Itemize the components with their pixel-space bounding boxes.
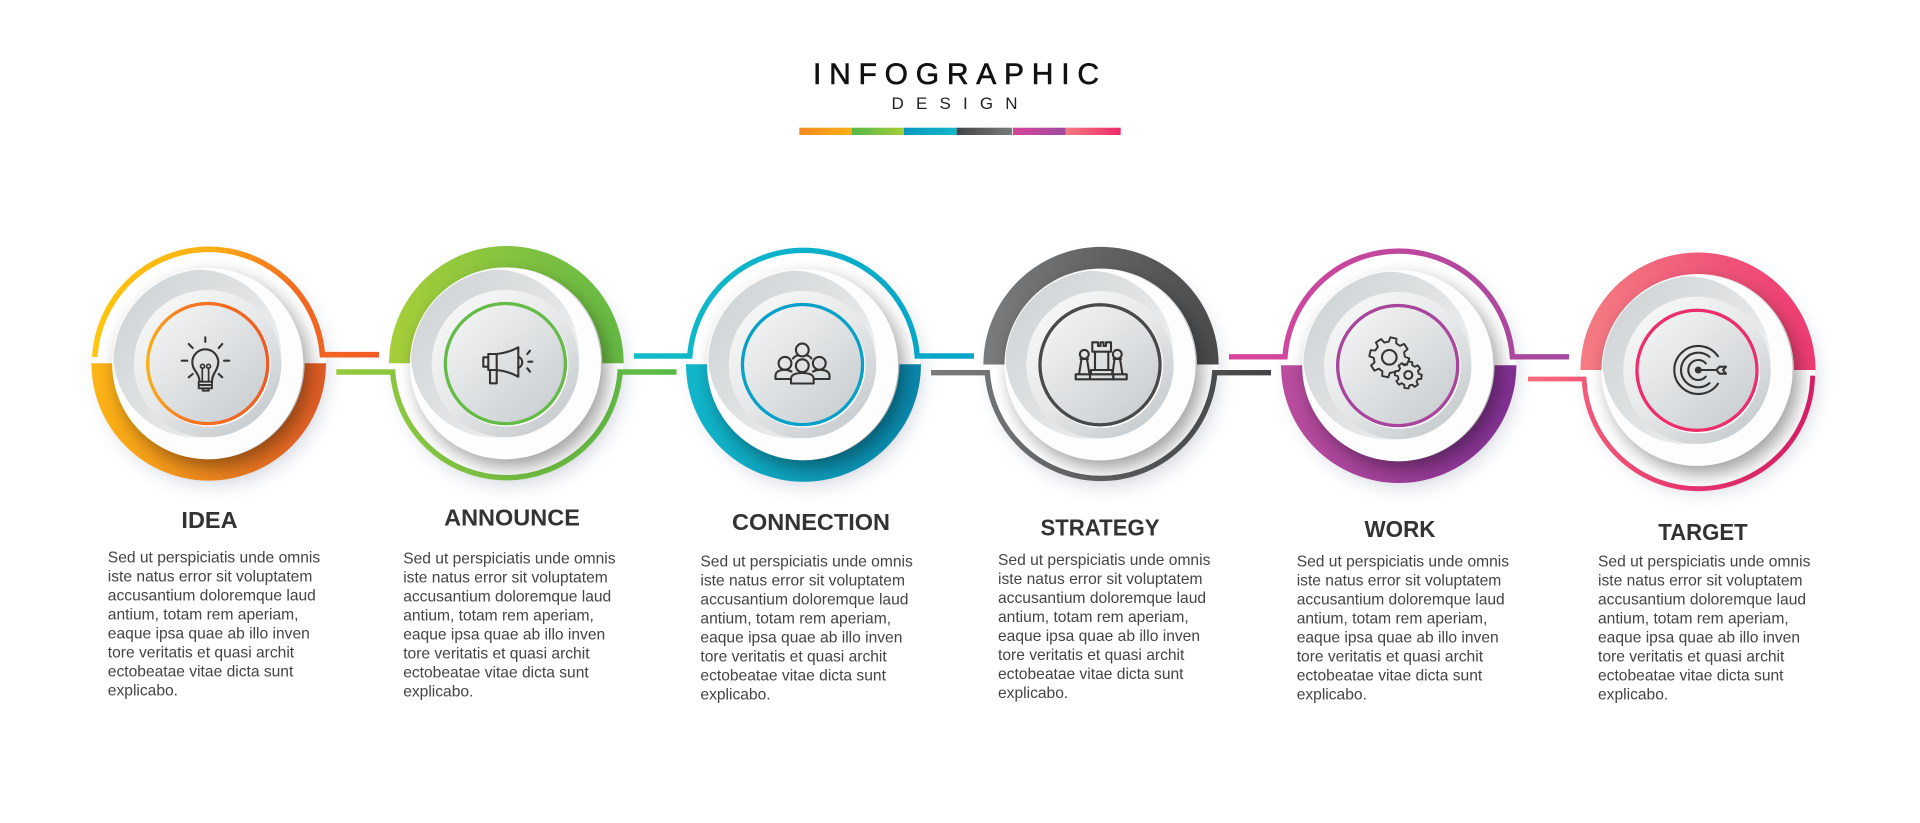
body text: explicabo. bbox=[403, 684, 473, 701]
body text: ectobeatae vitae dicta sunt bbox=[108, 664, 294, 681]
body text: Sed ut perspiciatis unde omnis bbox=[403, 551, 616, 568]
body text: tore veritatis et quasi archit bbox=[1297, 649, 1484, 666]
circle: target bbox=[1528, 253, 1819, 495]
body text: Sed ut perspiciatis unde omnis bbox=[1598, 554, 1811, 571]
body text: Sed ut perspiciatis unde omnis bbox=[108, 550, 320, 567]
circle: idea bbox=[91, 246, 379, 488]
panel: strategy bbox=[931, 247, 1271, 702]
icon: light bulb bbox=[182, 337, 229, 391]
body text: antium, totam rem aperiam, bbox=[108, 607, 298, 624]
body text: ectobeatae vitae dicta sunt bbox=[403, 665, 589, 682]
colour bar bbox=[799, 128, 1121, 135]
body text: iste natus error sit voluptatem bbox=[998, 571, 1203, 588]
body text: Sed ut perspiciatis unde omnis bbox=[998, 552, 1211, 569]
body text: accusantium doloremque laud bbox=[998, 590, 1206, 607]
body text: accusantium doloremque laud bbox=[1598, 592, 1806, 609]
body text: iste natus error sit voluptatem bbox=[700, 573, 905, 590]
body text: Sed ut perspiciatis unde omnis bbox=[1297, 554, 1509, 571]
body text: antium, totam rem aperiam, bbox=[403, 608, 594, 625]
body text: eaque ipsa quae ab illo inven bbox=[108, 626, 310, 643]
heading: WORK bbox=[1364, 516, 1436, 542]
body text: tore veritatis et quasi archit bbox=[108, 645, 295, 662]
body text: iste natus error sit voluptatem bbox=[403, 570, 608, 587]
panel: announce bbox=[336, 246, 676, 701]
icon: target bbox=[1674, 346, 1726, 394]
body text: tore veritatis et quasi archit bbox=[403, 646, 590, 663]
body text: ectobeatae vitae dicta sunt bbox=[1598, 668, 1784, 685]
body text: explicabo. bbox=[1297, 687, 1367, 704]
body text: antium, totam rem aperiam, bbox=[998, 609, 1189, 626]
circle: connection bbox=[634, 247, 974, 489]
heading: TARGET bbox=[1658, 519, 1748, 545]
panel: target bbox=[1528, 253, 1819, 704]
icon: chess pieces bbox=[1076, 342, 1127, 379]
heading: IDEA bbox=[181, 507, 238, 533]
body text: eaque ipsa quae ab illo inven bbox=[1598, 630, 1800, 647]
body text: antium, totam rem aperiam, bbox=[1598, 611, 1789, 628]
body text: ectobeatae vitae dicta sunt bbox=[1297, 668, 1483, 685]
body text: tore veritatis et quasi archit bbox=[700, 649, 887, 666]
body text: iste natus error sit voluptatem bbox=[108, 569, 312, 586]
heading: CONNECTION bbox=[732, 509, 890, 535]
body text: tore veritatis et quasi archit bbox=[1598, 649, 1785, 666]
body text: ectobeatae vitae dicta sunt bbox=[700, 668, 887, 685]
panel: idea bbox=[91, 246, 379, 700]
body text: explicabo. bbox=[108, 683, 178, 700]
body text: iste natus error sit voluptatem bbox=[1598, 573, 1803, 590]
circle: announce bbox=[336, 246, 676, 488]
body text: accusantium doloremque laud bbox=[1297, 592, 1505, 609]
title bbox=[813, 58, 1099, 113]
title: INFOGRAPHIC bbox=[813, 58, 1099, 91]
body text: accusantium doloremque laud bbox=[700, 592, 908, 609]
icon: gears bbox=[1366, 334, 1423, 390]
icon: megaphone bbox=[483, 347, 532, 383]
body text: eaque ipsa quae ab illo inven bbox=[403, 627, 605, 644]
heading: ANNOUNCE bbox=[444, 504, 580, 530]
body text: eaque ipsa quae ab illo inven bbox=[998, 628, 1200, 645]
body text: explicabo. bbox=[998, 685, 1068, 702]
body text: iste natus error sit voluptatem bbox=[1297, 573, 1501, 590]
body text: tore veritatis et quasi archit bbox=[998, 647, 1185, 664]
circle: work bbox=[1229, 248, 1569, 490]
body text: eaque ipsa quae ab illo inven bbox=[700, 630, 902, 647]
subtitle: DESIGN bbox=[892, 94, 1018, 113]
body text: accusantium doloremque laud bbox=[108, 588, 316, 605]
body text: explicabo. bbox=[1598, 687, 1668, 704]
icon: people group bbox=[776, 344, 830, 384]
panel: connection bbox=[634, 247, 974, 704]
circle: strategy bbox=[931, 247, 1271, 490]
body text: eaque ipsa quae ab illo inven bbox=[1297, 630, 1499, 647]
body text: ectobeatae vitae dicta sunt bbox=[998, 666, 1184, 683]
body text: accusantium doloremque laud bbox=[403, 589, 611, 606]
body text: Sed ut perspiciatis unde omnis bbox=[700, 554, 913, 571]
body text: explicabo. bbox=[700, 687, 771, 704]
body text: antium, totam rem aperiam, bbox=[1297, 611, 1487, 628]
panel: work bbox=[1229, 248, 1569, 704]
body text: antium, totam rem aperiam, bbox=[700, 611, 891, 628]
heading: STRATEGY bbox=[1040, 515, 1160, 541]
